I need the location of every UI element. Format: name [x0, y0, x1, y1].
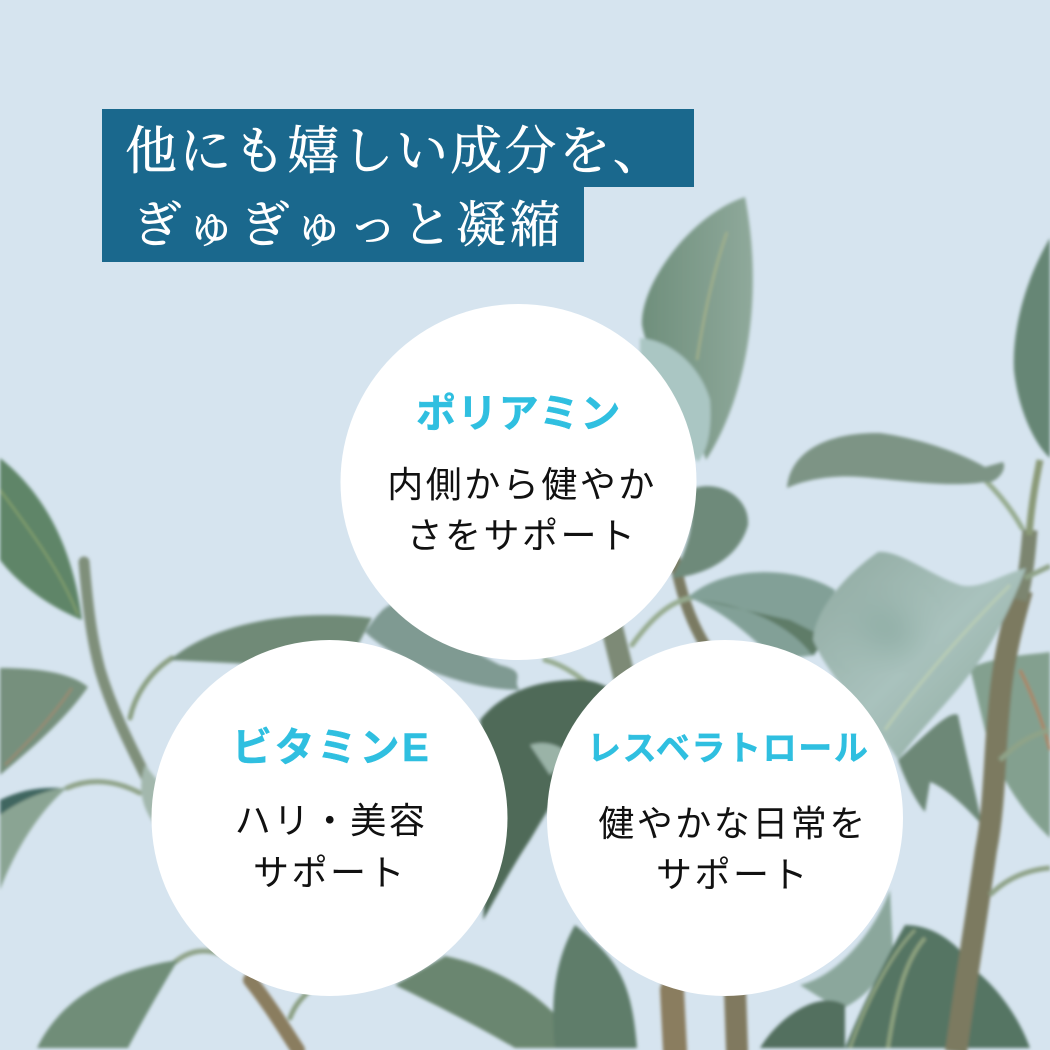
- description: さをサポート: [406, 515, 638, 556]
- description: サポート: [656, 854, 810, 895]
- heading: レスベラトロール: [587, 730, 869, 768]
- description: ハリ・美容: [235, 800, 427, 841]
- heading: ビタミンE: [232, 726, 431, 770]
- circle: resveratrol: [547, 640, 903, 996]
- title line 1: 他にも嬉しい成分を、: [125, 124, 667, 181]
- description: 健やかな日常を: [598, 803, 868, 844]
- back stems: [67, 480, 1022, 1050]
- circle: vitamin E: [152, 640, 508, 996]
- banner background: [102, 109, 694, 262]
- title banner: [102, 109, 694, 262]
- circle: polyamine: [340, 304, 696, 660]
- circle background: [152, 640, 508, 996]
- heading: ポリアミン: [416, 392, 622, 436]
- front trunk: [956, 460, 1050, 1050]
- description: 内側から健やか: [387, 464, 657, 505]
- title line 2: ぎゅぎゅっと凝縮: [132, 197, 564, 253]
- large pale leaf: [813, 552, 1026, 760]
- circle background: [547, 640, 903, 996]
- description: サポート: [253, 852, 407, 893]
- circle background: [340, 304, 696, 660]
